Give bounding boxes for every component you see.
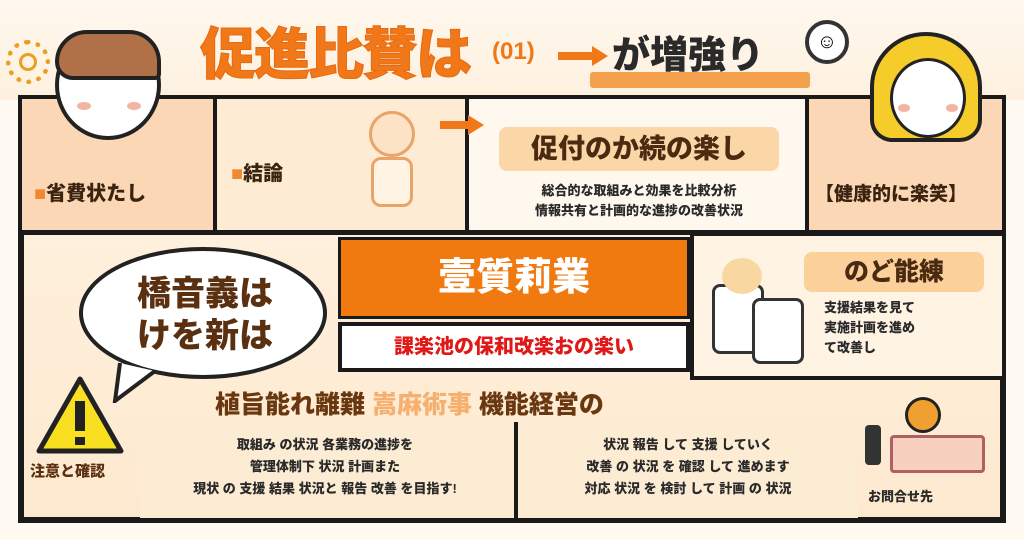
text: 総合的な取組みと効果を比較分析 (541, 183, 736, 198)
text: 改善 の 状況 を 確認 して 進めます (586, 459, 790, 474)
bottom box right (518, 422, 858, 518)
panel: top-left (18, 95, 217, 234)
text: て改善し (824, 340, 876, 355)
icon: characters (712, 258, 804, 364)
title (200, 23, 810, 88)
icon: spiky badge: ☺ (817, 31, 837, 53)
text: 取組み の状況 各業務の進捗を (237, 437, 413, 452)
heading: のど能練 (844, 258, 944, 286)
icon: old man (369, 111, 415, 207)
text: 実施計画を進め (824, 320, 915, 335)
heading: 促付のか続の楽し (531, 134, 747, 164)
text (535, 183, 743, 218)
heading (804, 252, 984, 292)
bubble text (137, 275, 273, 355)
arrow: top (440, 115, 484, 135)
text: 管理体制下 状況 計画また (250, 459, 400, 474)
text: 対応 状況 を 検討 して 計画 の 状況 (585, 481, 791, 496)
orange banner (338, 237, 690, 319)
icon: gear (6, 40, 50, 84)
character: left girl (55, 30, 161, 140)
icon: warning (36, 376, 124, 454)
bubble text: けを新は (137, 317, 273, 355)
text: 支援結果を見て (824, 300, 915, 315)
bottom box left (140, 422, 518, 518)
text: 現状 の 支援 結果 状況と 報告 改善 を目指す! (193, 481, 457, 496)
main frame (18, 95, 1006, 523)
warning label: 注意と確認 (30, 463, 105, 480)
text (824, 300, 915, 355)
character: right girl (870, 32, 982, 142)
section heading bottom: 植旨能れ離難 嵩麻術事 機能経営の (215, 391, 604, 419)
text: 情報共有と計画的な進捗の改善状況 (535, 203, 743, 218)
label: 【健康的に楽笑】 (815, 184, 967, 205)
title main text: 促進比賛は (200, 23, 470, 86)
arrow (558, 46, 608, 66)
text (584, 437, 792, 496)
speech bubble (79, 247, 327, 403)
label: ■結論 (231, 163, 283, 185)
panel: top-second (213, 95, 469, 234)
panel: right middle (690, 232, 1006, 380)
label: ■省費状たし (34, 183, 146, 205)
icon: phone (865, 397, 985, 473)
red text box (338, 322, 690, 372)
heading (499, 127, 779, 171)
bubble text: 橋音義は (137, 275, 273, 313)
phone label: お問合せ先 (868, 489, 933, 504)
subtitle: が増強り (612, 35, 764, 77)
panel: top-right (805, 95, 1006, 234)
icon: spiky badge (805, 20, 849, 64)
horizontal divider top row (18, 230, 1006, 235)
title number: (01) (492, 38, 535, 65)
text (193, 437, 457, 496)
background glow (0, 0, 1024, 100)
orange banner: 壹質莉業 (438, 257, 590, 299)
subtitle bar (590, 72, 810, 88)
panel: top-center (465, 95, 809, 234)
red text box: 課楽池の保和改楽おの楽い (394, 336, 634, 358)
text: 状況 報告 して 支援 していく (603, 437, 773, 452)
